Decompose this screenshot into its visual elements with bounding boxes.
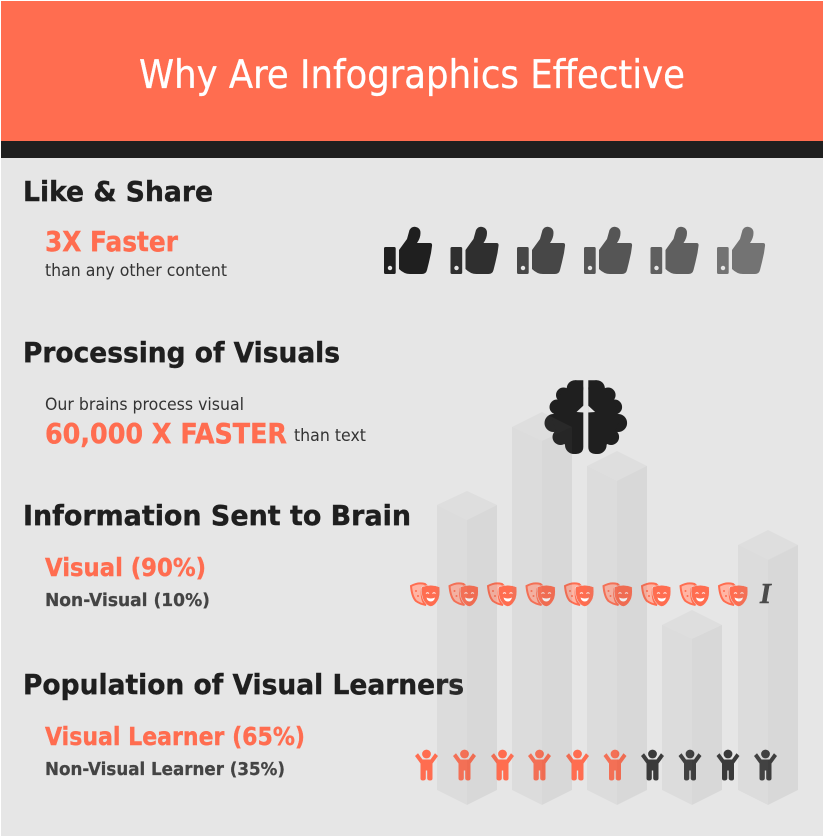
caption: than any other content: than any other content — [45, 261, 227, 281]
theatre mask icon row — [411, 583, 748, 606]
heading: information sent to brain: Information Sent to Brain — [23, 499, 411, 532]
thumbs-up icon row — [384, 227, 765, 274]
icon: letter I: I — [759, 579, 772, 610]
stat: visual learner 65%: Visual Learner (65%) — [45, 722, 305, 751]
stat: visual 90%: Visual (90%) — [45, 553, 206, 582]
stat: 60,000 X faster: 60,000 X FASTER — [45, 417, 287, 450]
people icon row — [415, 750, 777, 780]
stat: non-visual 10%: Non-Visual (10%) — [45, 591, 210, 611]
title: Why Are Infographics Effective — [139, 53, 685, 98]
section: population of visual learners — [23, 668, 777, 780]
bar 5 — [738, 530, 798, 805]
bar 4 — [662, 610, 722, 805]
section: processing of visuals — [23, 336, 366, 450]
heading: like and share: Like & Share — [23, 175, 213, 208]
heading: population of visual learners: Population of Visual Learners — [23, 668, 464, 701]
bar 3 — [587, 451, 647, 805]
header banner — [1, 1, 823, 141]
stat: 3X faster: 3X Faster — [45, 225, 178, 258]
isometric bar chart backdrop — [437, 412, 798, 805]
bar 2 — [512, 412, 572, 805]
caption: than text: than text — [294, 426, 366, 446]
bar 1 — [437, 491, 497, 805]
stat: non-visual learner 35%: Non-Visual Learner (35%) — [45, 760, 285, 780]
section: like and share — [23, 175, 765, 281]
dark header stripe — [1, 141, 823, 158]
heading: processing of visuals: Processing of Visuals — [23, 336, 340, 369]
section: information sent to brain — [23, 499, 772, 611]
icon: brain — [544, 380, 627, 454]
caption: our brains process visual: Our brains process visual — [45, 395, 244, 415]
